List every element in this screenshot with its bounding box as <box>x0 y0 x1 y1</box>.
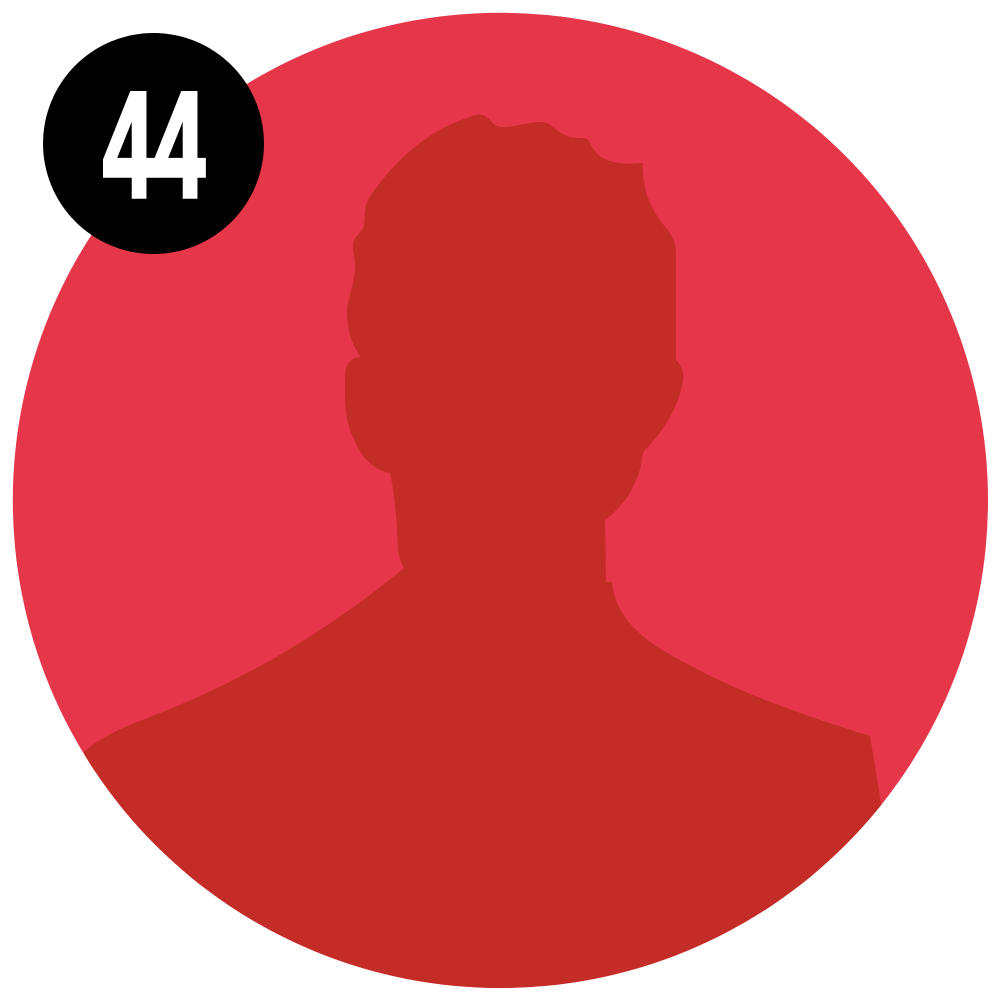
person silhouette <box>84 115 881 1000</box>
number badge <box>43 33 264 254</box>
badge number: 44 <box>103 60 205 228</box>
badge circle <box>43 33 264 254</box>
